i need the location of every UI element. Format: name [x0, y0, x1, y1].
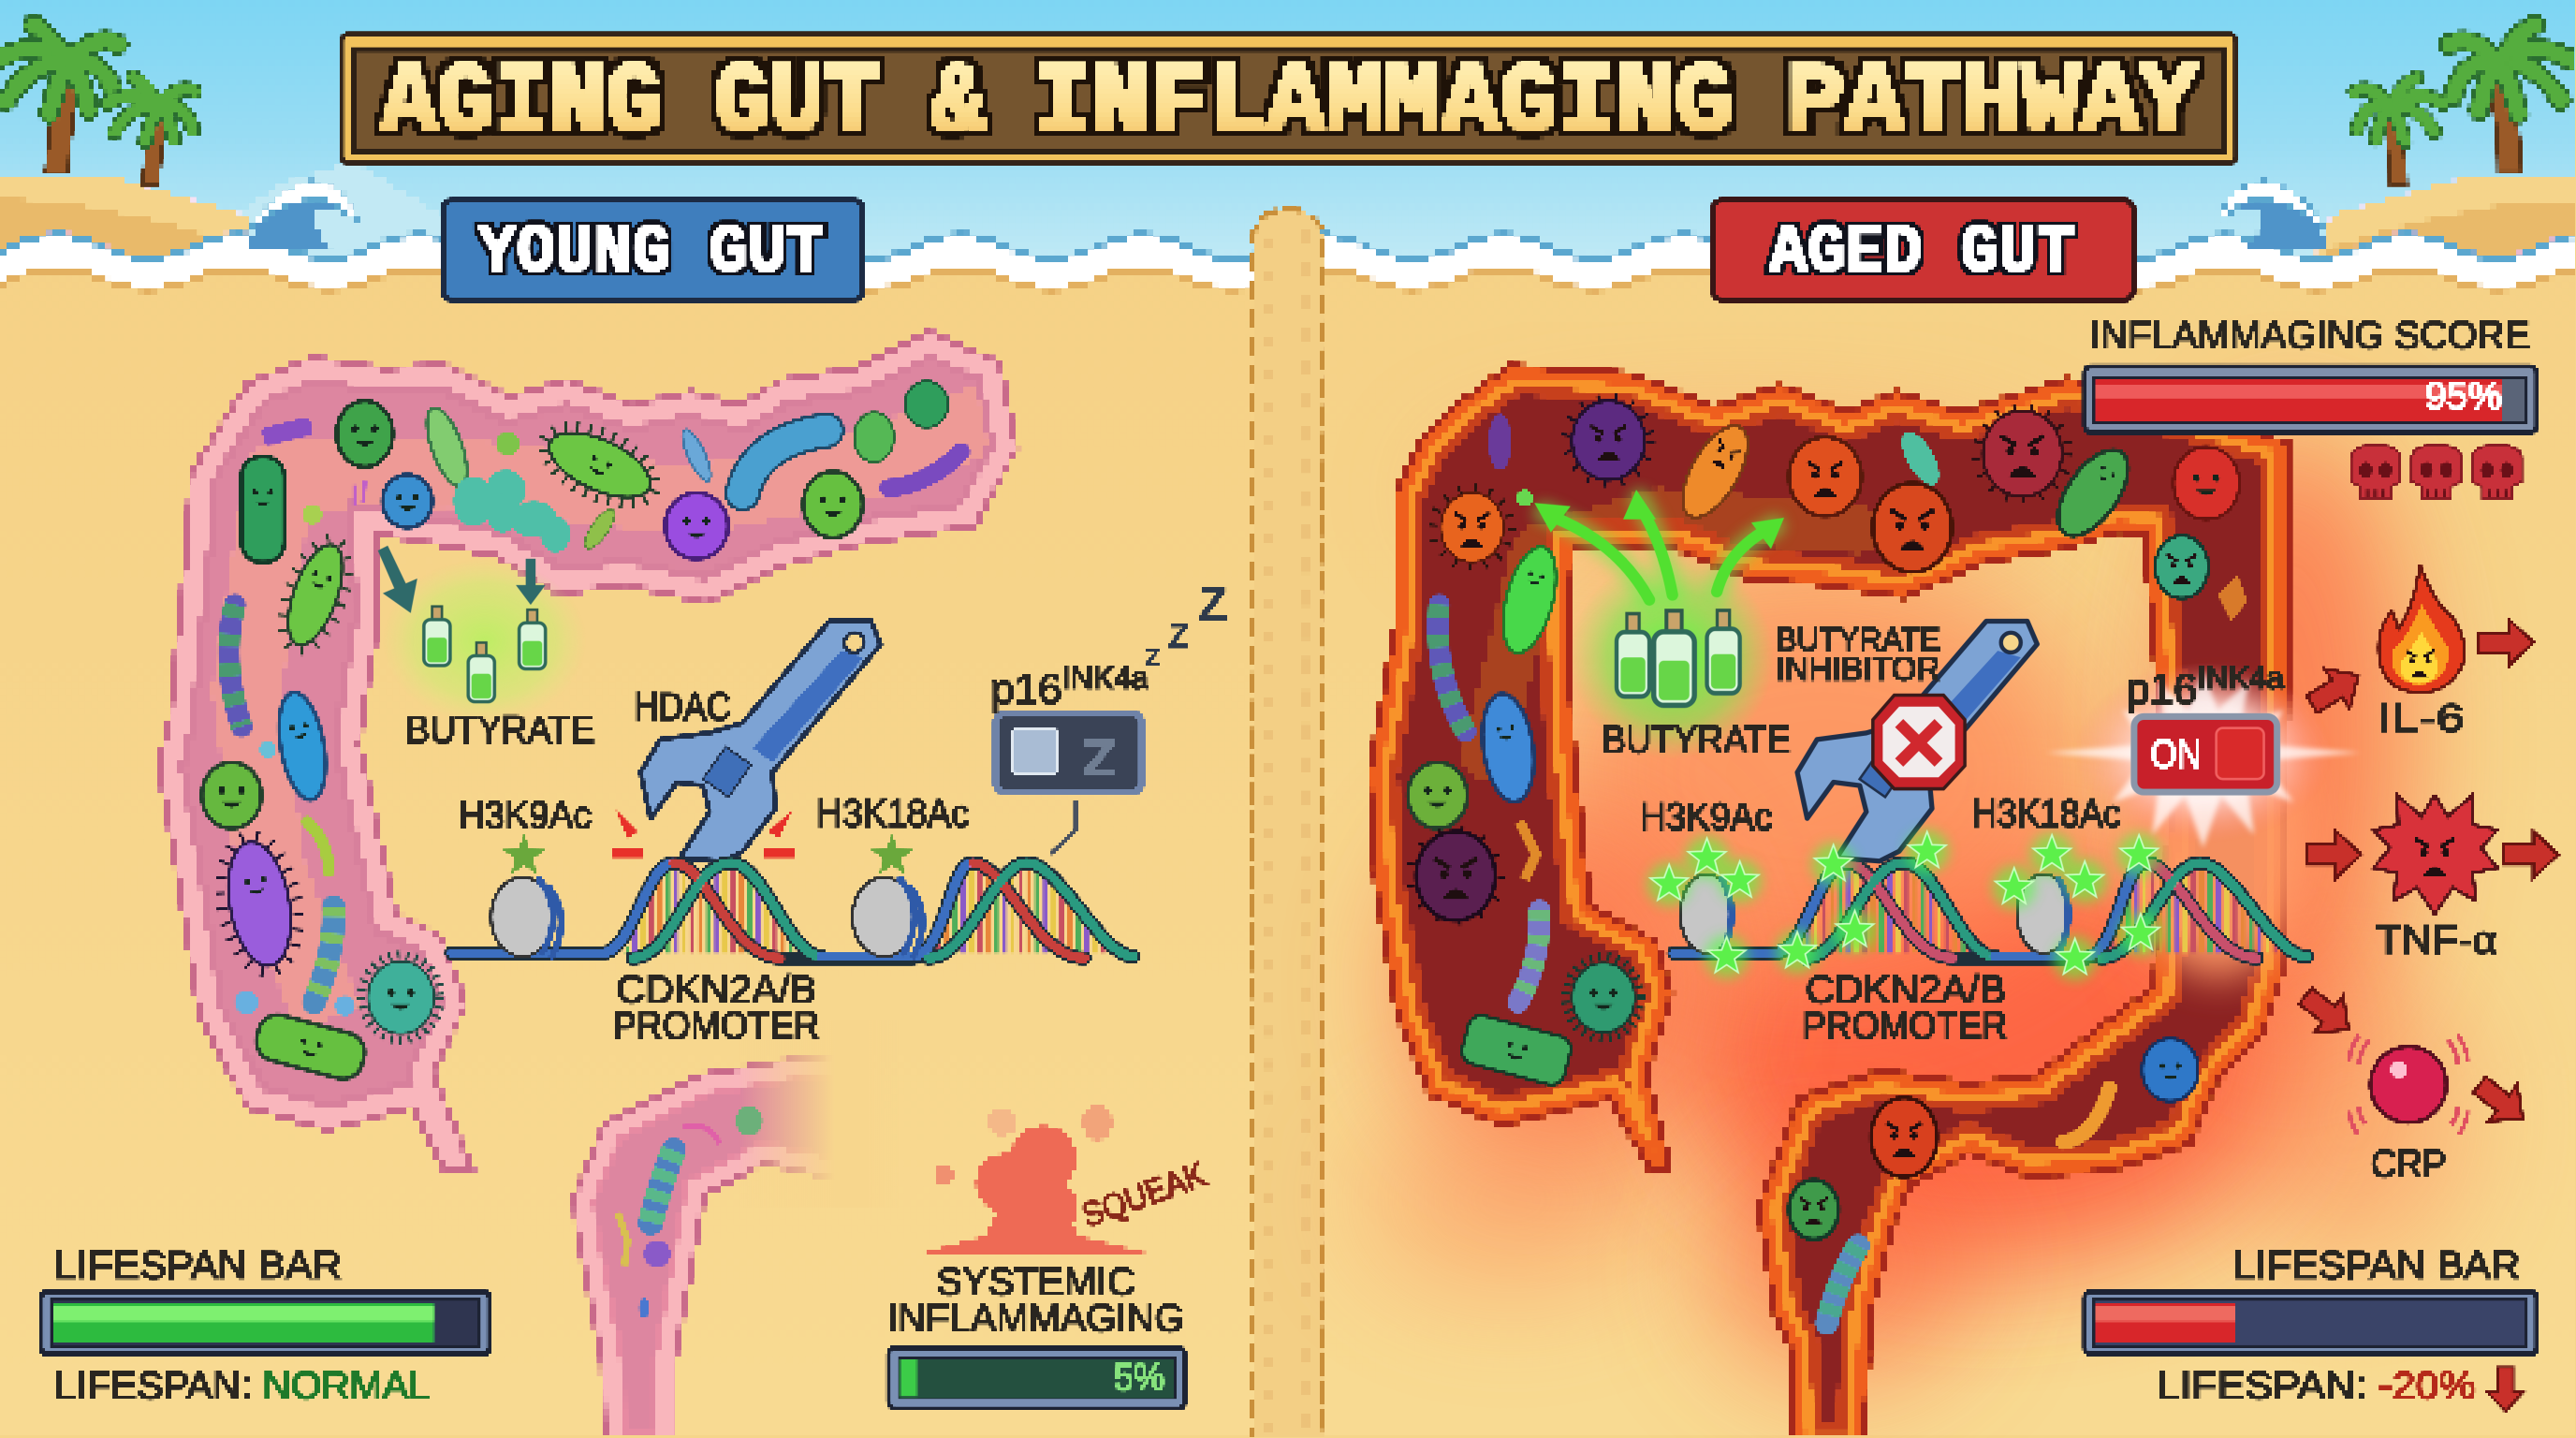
young gut microbes	[202, 381, 961, 1318]
systemic bar	[889, 1347, 1184, 1408]
DNA aged	[1674, 863, 2306, 958]
label: butyrate young: BUTYRATE	[406, 707, 594, 751]
cloud puffs	[920, 1125, 1150, 1254]
nucleosome 1	[1680, 874, 1733, 953]
label: promoter aged line 2: PROMOTER	[1802, 1003, 2008, 1047]
glow: gut interior	[1553, 567, 2095, 977]
tall green rod	[242, 457, 285, 562]
aged gut badge	[1713, 200, 2133, 300]
strand teal	[633, 863, 822, 958]
label: squeak: SQUEAK	[1077, 1154, 1211, 1235]
sleep z's	[1145, 578, 1228, 671]
bottle	[424, 607, 450, 666]
palm trees	[0, 24, 2571, 184]
label: TNF-alpha: TNF-α	[2376, 917, 2497, 961]
small green rod	[579, 506, 620, 552]
teal clump	[453, 470, 570, 552]
right island shadow	[2308, 200, 2576, 271]
nucleosome 2	[853, 877, 923, 957]
glow: lower gut	[1676, 838, 2300, 1266]
purple rod	[1488, 414, 1512, 470]
red-orange coccus	[1789, 437, 1862, 516]
pink arc	[683, 1126, 720, 1144]
label: p16 young: p16	[990, 665, 1061, 712]
palm: big left	[0, 24, 118, 172]
teal coccus	[2156, 536, 2208, 598]
label: inflammaging score: INFLAMMAGING SCORE	[2089, 313, 2530, 357]
glow: right side	[2177, 427, 2407, 1051]
pink squiggle	[355, 481, 365, 506]
star glow	[1647, 829, 2162, 979]
value: 5%: 5%	[1114, 1355, 1164, 1399]
green glow	[1571, 555, 1775, 759]
inflammaging score bar	[2085, 366, 2537, 433]
aged butyrate	[1534, 490, 1784, 759]
strand red	[1847, 863, 1954, 958]
rungs	[624, 866, 1114, 953]
green coccus	[1408, 763, 1467, 829]
striped worm	[1827, 1246, 1858, 1323]
sleep z's: Z	[1197, 578, 1228, 633]
striped worm	[314, 907, 333, 1003]
skull	[2351, 446, 2400, 498]
systemic cloud	[920, 1105, 1150, 1254]
spiky teal coccus	[361, 955, 440, 1040]
rungs	[1797, 866, 2287, 953]
blue dot	[259, 741, 276, 757]
cytokine icons	[2291, 565, 2558, 1411]
strand blue	[1995, 863, 2145, 957]
DNA young	[452, 802, 1134, 958]
blue rod	[1476, 691, 1540, 805]
label: lifespan minus 20: LIFESPAN: -20%	[2157, 1363, 2476, 1407]
title	[381, 48, 2198, 160]
green dot	[496, 433, 520, 455]
label: systemic: SYSTEMIC	[936, 1259, 1135, 1303]
young wrench and sparks	[613, 622, 881, 861]
arrow: into CRP	[2291, 978, 2363, 1048]
puff	[988, 1109, 1017, 1136]
value: 95%: 95%	[2425, 374, 2502, 418]
left wave curl	[246, 181, 357, 250]
green coccus	[202, 763, 261, 829]
puff	[935, 1166, 955, 1185]
label: lifespan bar aged: LIFESPAN BAR	[2232, 1243, 2520, 1287]
label: H3K18Ac aged: H3K18Ac	[1971, 791, 2121, 835]
strand blue	[1674, 863, 1847, 953]
outlines	[1674, 863, 2306, 958]
young colon	[156, 329, 1018, 1173]
arrow: TNF out	[2504, 831, 2558, 877]
label: H3K9Ac aged: H3K9Ac	[1640, 794, 1773, 838]
strand red	[2145, 863, 2257, 958]
p16 switch off	[996, 713, 1142, 792]
title: GUT	[714, 48, 879, 160]
glow: left lobe	[1405, 805, 1717, 1167]
spiky orange	[1432, 488, 1512, 567]
sea foam	[0, 235, 2576, 345]
red angry coccus	[1873, 483, 1952, 572]
red angry coccus	[1871, 1098, 1937, 1177]
label: lifespan bar young: LIFESPAN BAR	[54, 1243, 342, 1287]
striped worm	[1518, 910, 1540, 1003]
right wave curl	[2219, 181, 2330, 250]
spiky purple	[1566, 398, 1651, 483]
HDAC wrench	[640, 622, 881, 861]
spiky TNF-alpha	[2374, 796, 2497, 914]
star H3K18Ac	[871, 834, 913, 873]
glow: descending colon	[1708, 1151, 1971, 1381]
orange fragment	[2217, 575, 2247, 622]
aged wrench	[1797, 622, 2037, 861]
blue coccus	[383, 475, 432, 527]
palm: big right	[2450, 24, 2571, 172]
palm: small left	[108, 78, 195, 184]
aged lifespan bar	[2085, 1292, 2537, 1354]
spiky teal	[1566, 957, 1641, 1038]
teal rod	[1895, 426, 1947, 491]
arrow: IL-6 out	[2479, 620, 2533, 666]
orange rod	[1670, 416, 1761, 527]
light green rod	[419, 404, 475, 491]
sparks	[613, 810, 795, 858]
orange curved rod	[2063, 1088, 2110, 1142]
nucleosome 2	[2017, 874, 2070, 953]
glow: lower right	[2234, 970, 2465, 1266]
arrow: p16 to IL-6	[2300, 656, 2370, 724]
p16 burst	[2045, 662, 2361, 848]
p16 tether	[1051, 802, 1076, 853]
lifespan down arrow	[2487, 1368, 2524, 1411]
glowing green rod	[1493, 541, 1566, 658]
bottle	[468, 642, 494, 702]
red coccus	[2174, 447, 2239, 520]
title banner	[342, 35, 2236, 163]
label: ON: ON	[2150, 731, 2202, 777]
ON switch	[2134, 716, 2277, 792]
arrow: CRP out	[2466, 1066, 2537, 1137]
flame IL-6	[2378, 565, 2465, 692]
purple dot	[644, 1240, 670, 1267]
hairy green bacillus	[532, 411, 668, 519]
sleep z's: Z	[1168, 617, 1189, 655]
spiky crimson	[1976, 407, 2069, 500]
palm: small right	[2355, 78, 2442, 184]
orange scribble	[1519, 822, 1536, 879]
sea: left light band	[156, 161, 493, 279]
text labels	[54, 313, 2530, 1407]
yellow-green curved rod	[307, 822, 329, 871]
title: INFLAMMAGING	[1033, 48, 1734, 160]
label: butyrate inhibitor: BUTYRATE	[1776, 622, 1940, 658]
glow: upper gut	[1429, 427, 2054, 559]
green bacillus	[252, 1010, 369, 1083]
label: inhibitor line 2: INHIBITOR	[1776, 652, 1940, 688]
stars	[1650, 831, 2159, 974]
blue coccus	[2143, 1038, 2198, 1101]
young descending colon	[570, 1055, 828, 1435]
blocky green bacillus	[1459, 1013, 1573, 1088]
label: p16 young: INK4a	[1061, 662, 1149, 697]
label: p16 aged: p16	[2126, 665, 2197, 712]
nucleosome 1	[491, 877, 561, 957]
inflammation glow	[1364, 427, 2465, 1381]
purple curved rod	[889, 452, 961, 488]
label: H3K18Ac young: H3K18Ac	[816, 791, 970, 835]
strand teal	[929, 863, 1134, 958]
outlines	[452, 863, 1134, 958]
arrow: into TNF	[2306, 831, 2361, 877]
young butyrate bottles	[378, 546, 587, 723]
green coccus	[1789, 1180, 1838, 1240]
strand teal	[1806, 863, 1995, 958]
bottles	[1617, 610, 1740, 705]
glow	[383, 559, 587, 723]
label: IL-6: IL-6	[2378, 696, 2465, 740]
title: AGING	[381, 48, 662, 160]
right island	[2308, 174, 2576, 271]
aged gut microbes	[1408, 398, 2247, 1323]
blue spark	[639, 1299, 649, 1318]
strand red	[674, 863, 781, 958]
star H3K9Ac	[504, 834, 545, 873]
label: promoter aged: CDKN2A/B	[1806, 967, 2006, 1011]
left island	[0, 174, 263, 271]
green dot	[736, 1106, 762, 1136]
blue dot	[235, 991, 258, 1014]
green rod	[2044, 438, 2142, 548]
dark green coccus	[905, 381, 948, 427]
green dot	[302, 505, 322, 524]
blue dot	[335, 996, 355, 1016]
blocked HDAC wrench	[1797, 622, 2037, 861]
sleep z's: Z	[1145, 643, 1160, 671]
title: &	[931, 48, 986, 160]
label: butyrate aged: BUTYRATE	[1602, 717, 1791, 761]
aged gut badge: AGED GUT	[1769, 215, 2075, 293]
skull row	[2351, 446, 2522, 498]
blue rod	[271, 689, 332, 803]
bottle	[520, 609, 546, 668]
central divider	[1253, 211, 1323, 1438]
puff	[1083, 1105, 1112, 1140]
glow: lower left	[1364, 1109, 1660, 1290]
green coccus	[337, 401, 392, 467]
aged gut	[1367, 363, 2291, 1438]
green coccus happy	[803, 472, 862, 537]
striped worm	[1438, 605, 1466, 731]
strand blue	[822, 863, 973, 957]
burst halo	[2075, 662, 2331, 844]
striped worm	[229, 605, 242, 726]
yellow spark	[618, 1212, 627, 1266]
acetylation stars glowing	[1647, 829, 2162, 979]
CRP ball	[2349, 1035, 2467, 1134]
gut fade behind DNA	[2126, 698, 2310, 977]
young gut	[156, 329, 1018, 1438]
green dot	[1516, 490, 1533, 506]
hairy purple rod	[211, 829, 309, 978]
blue rod small	[678, 426, 716, 484]
arrowheads	[1534, 490, 1784, 549]
label: HDAC: HDAC	[634, 684, 731, 728]
young lifespan bar	[41, 1292, 490, 1354]
purple coccus	[666, 493, 728, 559]
arrow: microbe to butyrate	[378, 546, 417, 613]
lifespan bars	[41, 1292, 2537, 1408]
label: lifespan normal: LIFESPAN: NORMAL	[54, 1363, 431, 1407]
skull	[2472, 446, 2522, 498]
label: p16 aged: INK4a	[2197, 662, 2284, 697]
purple rod	[261, 417, 314, 447]
label: promoter young: CDKN2A/B	[616, 967, 816, 1011]
descending colon fade	[739, 1020, 899, 1208]
hairy green rod	[269, 530, 362, 660]
angry dark purple	[1410, 829, 1501, 922]
arrow: microbe to butyrate	[516, 559, 546, 605]
left island shadow	[0, 198, 263, 271]
burst rays	[2045, 670, 2361, 848]
label: CRP: CRP	[2371, 1141, 2446, 1185]
green coccus small	[855, 413, 894, 462]
skull	[2411, 446, 2461, 498]
strand blue	[452, 863, 674, 953]
label: inflammaging: INFLAMMAGING	[887, 1296, 1184, 1340]
strand teal	[2101, 863, 2306, 958]
blue curved rod	[742, 431, 827, 493]
label: H3K9Ac young: H3K9Ac	[459, 793, 592, 837]
arrows: butyrate to microbes	[1544, 500, 1775, 600]
inhibitor sign	[1873, 696, 1965, 789]
worm in descending colon	[651, 1151, 674, 1223]
strand red	[973, 863, 1084, 958]
young gut badge: YOUNG GUT	[478, 215, 825, 293]
young gut badge	[443, 200, 863, 300]
title: PATHWAY	[1786, 48, 2198, 160]
sky	[0, 0, 2576, 279]
label: promoter young line 2: PROMOTER	[613, 1003, 820, 1047]
